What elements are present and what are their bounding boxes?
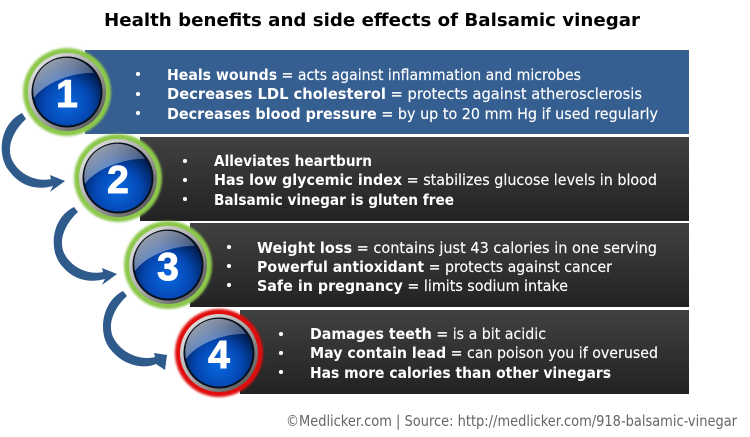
side effect list: May contain lead = can poison you if overused [310, 344, 658, 362]
side effect list: Damages teeth = is a bit acidic [310, 325, 546, 343]
benefit list 2 [183, 152, 657, 209]
benefit list 2: Alleviates heartburn [214, 152, 372, 170]
benefit list 1: Decreases LDL cholesterol = protects against atherosclerosis [167, 85, 642, 103]
side effect list: Has more calories than other vinegars [310, 364, 611, 382]
benefit list 2: Balsamic vinegar is gluten free [214, 191, 454, 209]
benefit list 1: Decreases blood pressure = by up to 20 mm Hg if used regularly [167, 105, 658, 123]
side effect list [279, 325, 658, 382]
benefit list 3: Powerful antioxidant = protects against cancer [257, 258, 613, 276]
badge 1 [23, 48, 111, 136]
badge 2 [74, 134, 162, 222]
panel 1: blue benefits [85, 50, 689, 134]
benefit list 2: Has low glycemic index = stabilizes glucose levels in blood [214, 171, 657, 189]
arrow 1 to 2 [2, 113, 65, 192]
benefit list 1: Heals wounds = acts against inflammation and microbes [167, 66, 581, 84]
panel 4: dark side effects [240, 310, 689, 394]
benefit list 3: Safe in pregnancy = limits sodium intake [257, 277, 568, 295]
badge 1: 1 [56, 73, 78, 116]
panel 3: dark benefits [190, 223, 689, 307]
title: Health benefits and side effects of Balsamic vinegar [104, 10, 640, 31]
badge 3 [124, 221, 212, 309]
badge 3: 3 [157, 246, 179, 289]
benefit list 1 [136, 66, 658, 123]
panel 2: dark benefits [140, 137, 689, 221]
benefit list 3 [227, 239, 657, 295]
benefit list 3: Weight loss = contains just 43 calories in one serving [257, 239, 657, 257]
arrow 2 to 3 [54, 207, 117, 285]
badge 4 [175, 309, 263, 397]
arrow 3 to 4 [103, 291, 167, 370]
badge 2: 2 [107, 159, 129, 202]
badge 4: 4 [208, 334, 230, 377]
